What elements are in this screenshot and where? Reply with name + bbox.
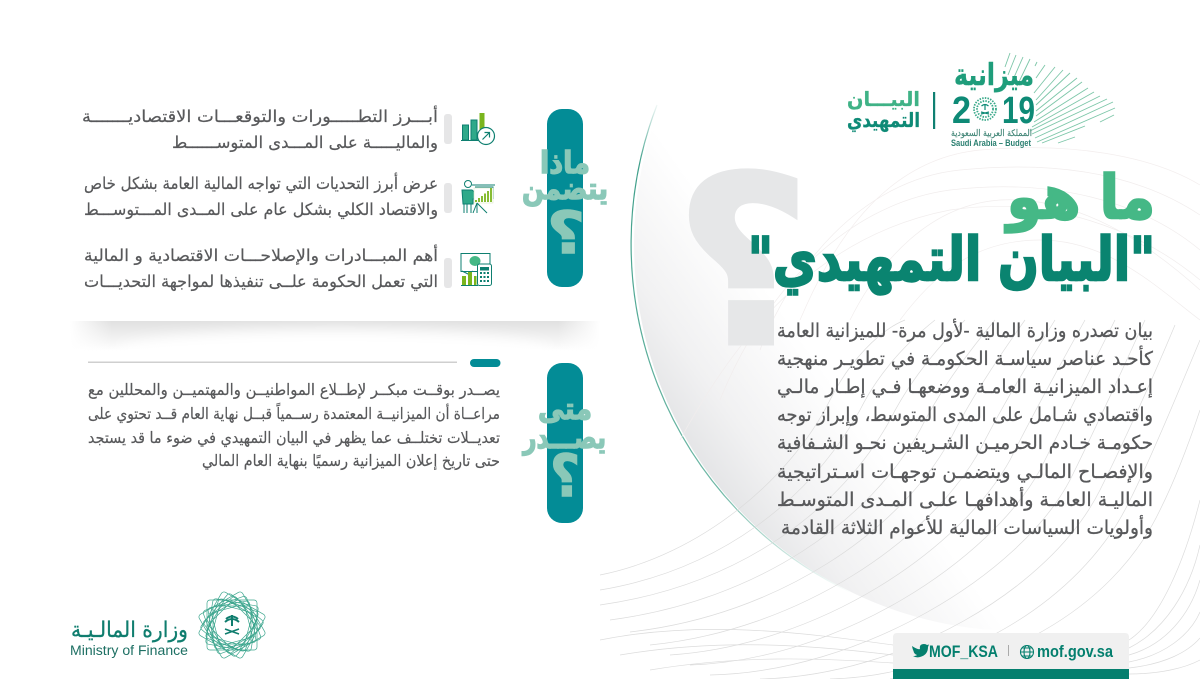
main description paragraph: والإفصـاح المالـي ويتضمـن توجهـات اسـتراتيجية (777, 461, 1153, 483)
icon: presenter at chart board (462, 180, 495, 213)
includes text: item two: والاقتصاد الكلي بشكل عام على المــدى المـــتوســـط (84, 200, 438, 220)
heading: when issued: ؟ (550, 442, 580, 510)
main description paragraph: بيان تصدره وزارة المالية -لأول مرة- للميزانية العامة (777, 319, 1153, 342)
heading: what it includes: ؟ (547, 199, 585, 267)
issued description: يصــدر بوقــت مبكــر لإطــلاع المواطنيــن والمهتميــن والمحللين مع (88, 381, 500, 400)
includes text: item one (82, 105, 438, 153)
logo: year 2019: 19 (1002, 90, 1035, 132)
issued description: تعديــلات تختلــف عما يظهر في البيان التمهيدي في ضوء ما قد يستجد (88, 429, 500, 448)
budget 2019 logo (951, 53, 1115, 148)
logo: english caption: Saudi Arabia – Budget (951, 138, 1031, 148)
faded question mark watermark: ؟ (675, 128, 810, 398)
logo: year 2019: 2 (952, 90, 971, 132)
logo: mizaniyah wordmark: ميزانية (954, 58, 1034, 93)
website address: mof.gov.sa (1037, 642, 1113, 661)
heading: what it includes (522, 146, 608, 267)
marker pills (444, 114, 452, 288)
panel: when it is issued (88, 359, 606, 523)
teal bar (547, 363, 583, 523)
teal accent pill (470, 359, 500, 367)
issued description: مراعــاة أن الميزانيــة المعتمدة رســمياً قبــل نهاية العام قــد تحتوي على (88, 403, 500, 424)
main description paragraph: وأولويات السياسات المالية للأعوام الثلاثة القادمة (781, 515, 1153, 539)
contact bar (893, 633, 1129, 679)
icon: banknote and calculator (461, 254, 492, 286)
ministry arabic name: وزارة المالـيـة (71, 618, 188, 643)
main description paragraph: واقتصادي شـامل على المدى المتوسط، وإبراز توجه (777, 404, 1153, 427)
heading: when issued (521, 392, 606, 510)
preliminary statement label (847, 87, 920, 133)
main description paragraph: حكومـة خـادم الحرميـن الشـريفين نحـو الشـفافية (777, 432, 1153, 454)
preliminary statement label: التمهيدي (847, 108, 920, 133)
includes text: item three: أهم المبـــادرات والإصلاحـــات الاقتصادية و المالية (84, 244, 438, 266)
main description paragraph: الماليـة العامـة وأهدافهـا علـى المـدى المتوسـط (777, 487, 1153, 511)
panel: what it includes (82, 105, 608, 292)
rule line (88, 362, 457, 363)
icon: globe (1020, 646, 1034, 658)
icon: twitter bird (912, 644, 929, 657)
heading: when issued: متى (538, 392, 592, 427)
includes text: item three: التي تعمل الحكومة علــى تنفيذها لمواجهة التحديـــات (84, 272, 438, 292)
title (748, 163, 1155, 295)
title: ما هو (1004, 163, 1155, 233)
includes text: item three (84, 244, 438, 292)
logo divider (933, 92, 935, 129)
issued description (88, 381, 500, 471)
background: fine contour lines (600, 148, 1200, 679)
twitter handle: MOF_KSA (929, 642, 998, 661)
main description paragraph: إعـداد الميزانيـة العامـة ووضعهـا فـي إطـار مالـي (777, 376, 1153, 399)
heading: what it includes: يتضمن (522, 172, 608, 207)
main description paragraph: كأحـد عناصر سياسـة الحكومـة في تطويـر منهجية (777, 345, 1154, 370)
ministry of finance logo (70, 591, 266, 659)
includes text: item one: والماليـــــة على المـــدى المتوســــــط (172, 133, 438, 153)
includes text: item two: عرض أبرز التحديات التي تواجه المالية العامة بشكل خاص (84, 172, 438, 194)
heading: what it includes: ماذا (540, 146, 590, 181)
logo: year 2019 (952, 90, 1035, 132)
section shadow divider (70, 321, 600, 374)
teal bar (547, 109, 583, 287)
logo: kingdom caption: المملكة العربية السعودية (951, 129, 1032, 139)
preliminary statement label: البيـــان (847, 87, 920, 111)
icon: bar chart with arrow (461, 113, 494, 144)
logo: saudi map line pattern (1005, 53, 1115, 143)
background: large circle with gradient (631, 0, 1200, 631)
separator (1008, 645, 1009, 656)
ministry english name: Ministry of Finance (70, 643, 188, 658)
issued description: حتى تاريخ إعلان الميزانية رسميًا بنهاية العام المالي (202, 452, 500, 471)
includes text: item two (84, 172, 438, 220)
logo: small emblem (974, 98, 996, 120)
main description paragraph (777, 319, 1154, 539)
heading: when issued: يصـــدر (521, 421, 606, 456)
includes text: item one: أبـــرز التطـــــورات والتوقعـــات الاقتصاديـــــــة (82, 105, 438, 127)
ministry emblem rosette (198, 591, 266, 659)
